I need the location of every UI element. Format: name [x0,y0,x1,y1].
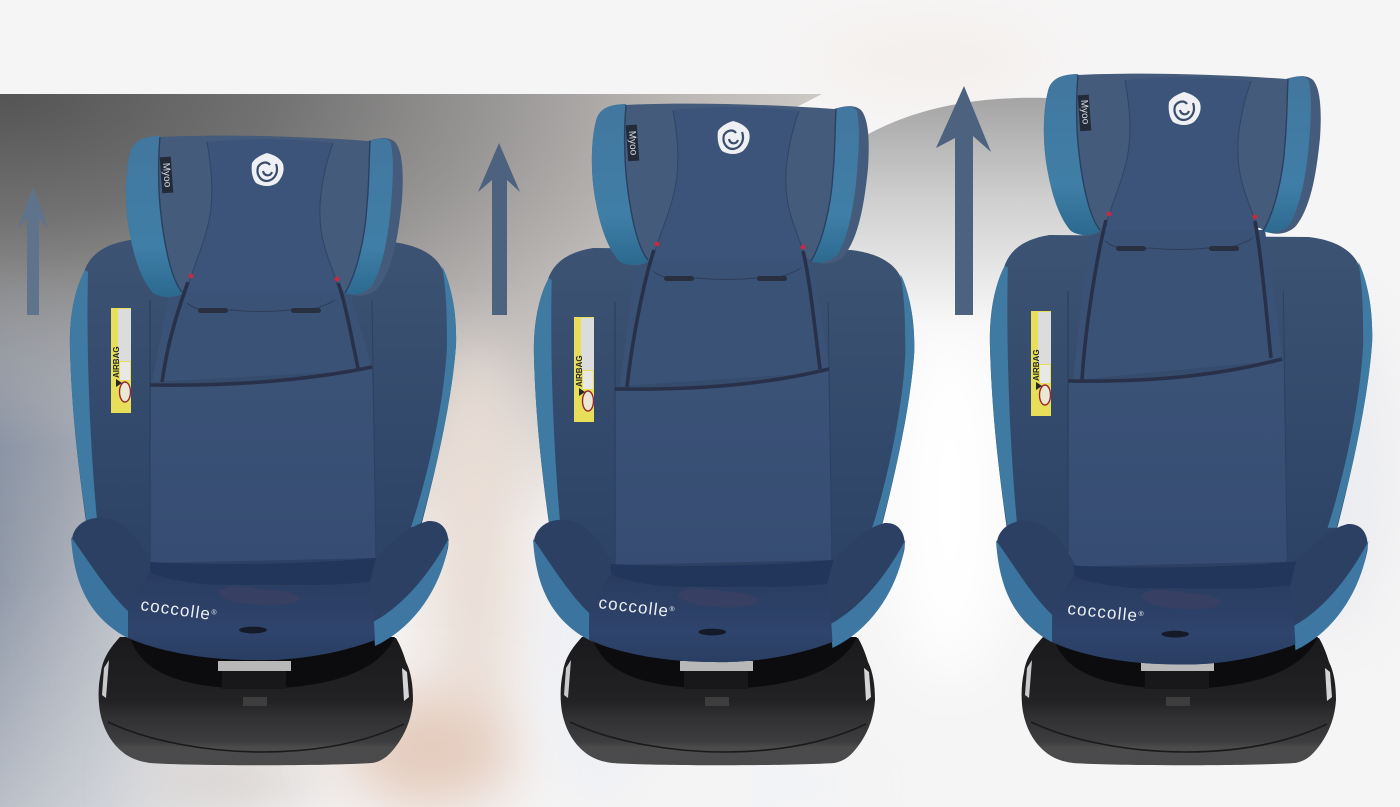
airbag sticker [1031,311,1051,416]
seat chest panel [152,290,372,382]
airbag text: AIRBAG [575,355,584,387]
headrest [1044,74,1321,260]
brand name: ® [211,608,218,617]
headrest tag: Myoo [1078,99,1091,125]
car seat: middle headrest position [533,104,914,765]
grey arc backdrop [840,98,1125,330]
harness straps [615,250,829,389]
harness straps [1068,220,1282,381]
dark swoosh backdrop [0,94,822,807]
car seat: lowest headrest position [70,136,456,765]
airbag text: AIRBAG [112,346,121,378]
seat back [990,235,1372,587]
seat chest panel [620,260,830,386]
airbag sticker [111,308,131,413]
headrest [126,136,403,322]
headrest tag: Myoo [626,130,639,156]
airbag text: AIRBAG [1032,349,1041,381]
seat base [99,637,413,765]
arrow: tall height [936,86,991,315]
brand name: ® [1138,609,1145,618]
cushion [533,520,905,662]
arrow: medium height [478,143,520,315]
brand name: coccolle [1067,599,1139,625]
seat back [70,240,456,585]
headrest logo [718,121,750,154]
headrest logo [252,153,284,186]
seat base [1022,637,1336,765]
headrest tag: Myoo [160,162,173,188]
headrest [592,104,869,290]
headrest logo [1169,92,1201,125]
seat chest panel [1073,230,1283,380]
brand name: coccolle [598,593,670,621]
car seat: highest headrest position [990,74,1372,765]
cushion [996,521,1368,665]
brand name: coccolle [139,595,212,624]
arrow: small height [18,187,48,315]
cushion [71,518,449,660]
airbag sticker [574,317,594,422]
seat base [561,637,875,765]
harness straps [150,282,372,385]
brand name: ® [669,605,676,613]
seat back [534,248,914,593]
